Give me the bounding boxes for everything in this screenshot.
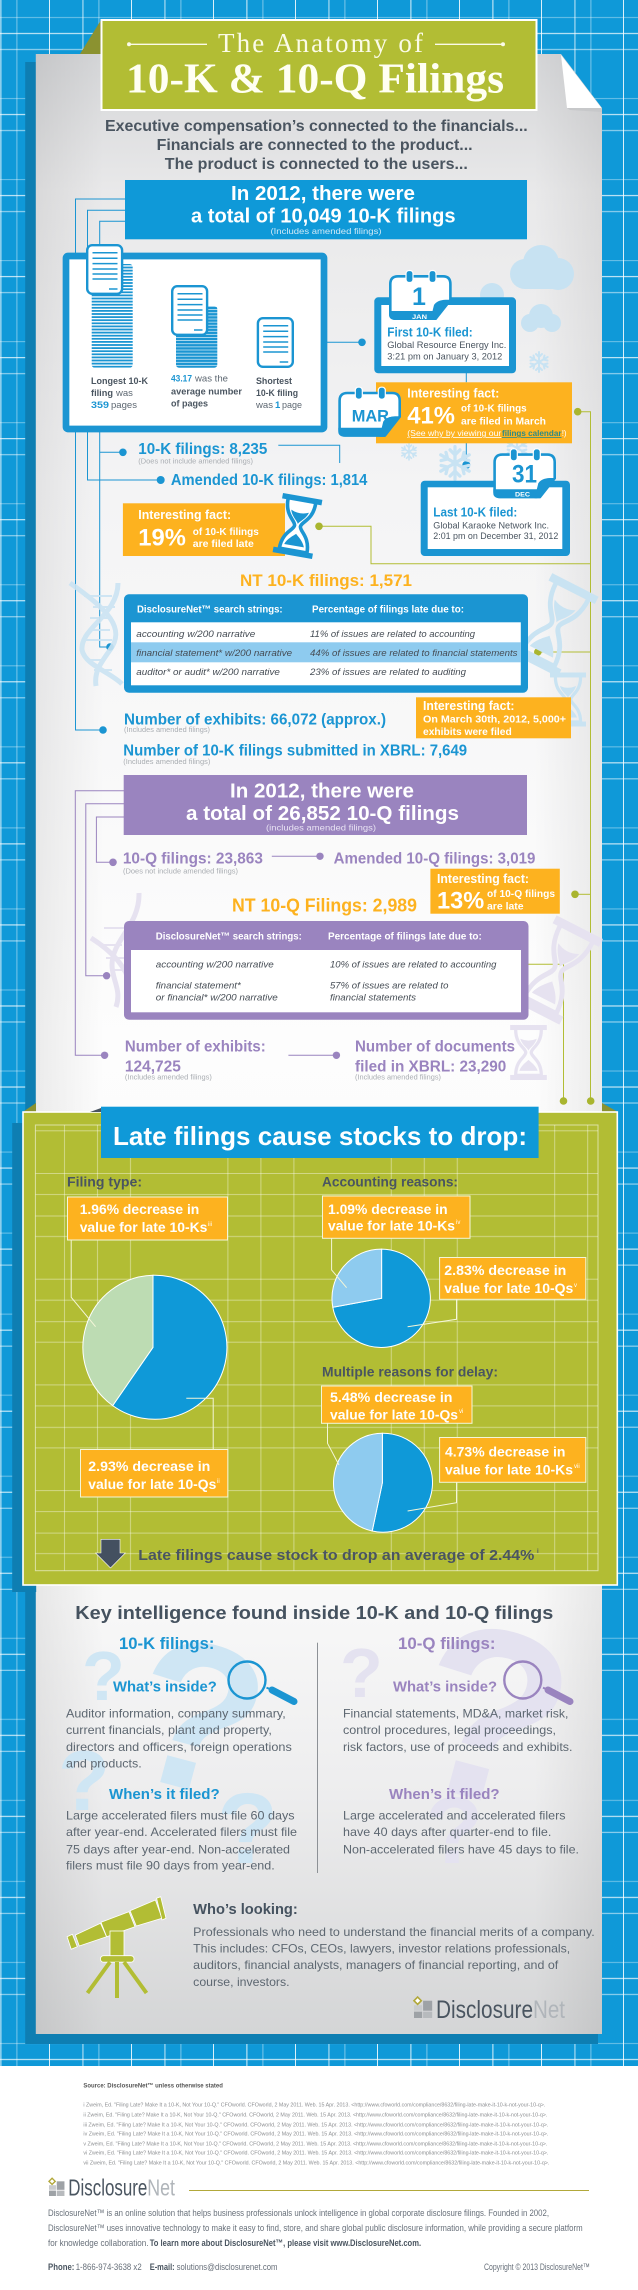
10-K connector dots: [99, 338, 470, 734]
shortest label: [255, 376, 302, 411]
amended 10-K stat: Amended 10-K filings: 1,814: [171, 472, 368, 489]
question mark decoration: ?: [82, 1637, 125, 1715]
callout: 2.93%: 2.93% decrease in: [88, 1458, 210, 1474]
NT 10-K table: 23% of issues are related to auditing: [309, 667, 467, 678]
divider: [317, 1643, 318, 1873]
March calendar icon: MAR: [352, 408, 389, 426]
icon: down arrow: [96, 1539, 125, 1568]
NT 10-Q table: or financial* w/200 narrative: [156, 993, 278, 1004]
interesting fact: 13%: are late: [487, 901, 524, 913]
contact line: solutions@disclosurenet.com: [177, 2262, 278, 2273]
average label: was the: [194, 374, 228, 385]
page count panel: [66, 245, 324, 429]
column: 10-Q filings: When’s it filed?: [389, 1787, 500, 1803]
amended 10-Q stat: Amended 10-Q filings: 3,019: [334, 850, 536, 867]
last 10-K card: Last 10-K filed:: [433, 506, 517, 520]
interesting fact: 19%: 19%: [138, 525, 186, 552]
interesting fact: 41%: (See why by viewing our: [407, 429, 502, 438]
column: 10-K filings: after year-end. Accelerated filers must file: [66, 1825, 297, 1839]
shortest filing icon: [258, 318, 293, 367]
last 10-K card: Global Karaoke Network Inc.: [433, 520, 549, 531]
who's looking: [193, 1902, 595, 1989]
DNA decoration purple: [91, 893, 139, 1007]
about text: for knowledge collaboration.: [48, 2238, 148, 2249]
column: 10-Q filings: Non-accelerated filers have 45 days to file.: [343, 1842, 579, 1856]
footer sources: i Zweim, Ed. "Filing Late? Make It a 10-K, Not Your 10-Q." CFOworld. CFOworld, 2 May 2011. Web. 15 Apr. 2013. <http://www.cfoworld.com/compliance/8632/filing-late-make-it-10-k-not-your-10-q>.: [83, 2103, 546, 2109]
interesting fact: 13%: 13%: [437, 887, 484, 914]
March calendar icon: [338, 387, 401, 437]
10-Q filings stat: [123, 850, 263, 876]
who's looking: This includes: CFOs, CEOs, lawyers, investor relations professionals,: [193, 1942, 570, 1956]
column: 10-K filings: [66, 1635, 297, 1872]
intro text: The product is connected to the users...: [165, 156, 468, 173]
icon: hourglass: [273, 493, 322, 559]
XBRL 10-Q stat: Number of documents: [355, 1039, 515, 1056]
10-Q filings stat: (Does not include amended filings): [123, 867, 238, 876]
XBRL 10-K stat: [123, 742, 467, 766]
callout: 1.96%: iii: [208, 1222, 212, 1228]
first 10-K card: 1: [412, 283, 426, 311]
XBRL 10-K stat: Number of 10-K filings submitted in XBRL: 7,649: [123, 742, 467, 759]
callout: 2.93%: ii: [217, 1479, 220, 1485]
10-Q connector dots: [101, 853, 340, 1059]
interesting fact: 19%: of 10-K filings: [193, 526, 259, 538]
footer sources: vi Zweim, Ed. "Filing Late? Make It a 10-K, Not Your 10-Q." CFOworld. CFOworld, 2 May 2011. Web. 15 Apr. 2013. <http://www.cfoworld.com/compliance/8632/filing-late-make-it-10-k-not-your-10-q>.: [83, 2151, 549, 2157]
question mark decoration: ?: [340, 1634, 383, 1712]
title banner: [80, 20, 536, 110]
10-Q connector lines: [75, 791, 334, 1055]
callout: 2.83%: [440, 1258, 586, 1299]
callout: 1.09%: [322, 1196, 470, 1238]
10-K exhibits stat: (Includes amended filings): [124, 725, 210, 734]
interesting fact: 41%: filings calendar: [502, 429, 562, 438]
contact line: Copyright © 2013 DisclosureNet™: [484, 2262, 590, 2273]
column: 10-K filings: Large accelerated filers must file 60 days: [66, 1808, 295, 1822]
accounting reasons label: Accounting reasons:: [322, 1175, 458, 1190]
about text: To learn more about DisclosureNet™, please visit www.DisclosureNet.com.: [150, 2238, 421, 2249]
interesting fact: exhibits: exhibits were filed: [423, 727, 512, 738]
interesting fact: exhibits: [416, 697, 571, 738]
callout: 1.09%: value for late 10-Ks: [328, 1218, 455, 1234]
average label: 43.17: [171, 374, 192, 385]
callout: 2.83%: value for late 10-Qs: [444, 1280, 574, 1296]
who's looking: Professionals who need to understand the financial merits of a company.: [193, 1925, 595, 1939]
XBRL 10-K stat: (Includes amended filings): [123, 757, 211, 766]
10-Q total banner: (includes amended filings): [266, 823, 376, 833]
shortest label: Shortest: [256, 376, 293, 387]
NT 10-Q table: [124, 921, 528, 1020]
longest label: [91, 376, 148, 411]
footer sources: [83, 2083, 550, 2167]
callout: 2.93%: value for late 10-Qs: [88, 1476, 217, 1492]
10-Q total banner: a total of 26,852 10-Q filings: [186, 802, 459, 825]
interesting fact: exhibits: On March 30th, 2012, 5,000+: [423, 715, 566, 726]
average drop statement: Late filings cause stock to drop an average of 2.44%: [138, 1547, 534, 1564]
key intelligence heading: Key intelligence found inside 10-K and 10-Q filings: [75, 1603, 553, 1623]
question mark decoration: ?: [58, 1734, 110, 1829]
longest label: 359: [91, 400, 109, 411]
NT 10-Q table: 10% of issues are related to accounting: [330, 960, 497, 971]
intro text: [105, 118, 528, 173]
title banner: The Anatomy of: [218, 28, 423, 58]
10-K total banner: (Includes amended filings): [270, 226, 382, 236]
interesting fact: 41%: 41%: [407, 402, 455, 429]
snowflakes: [402, 352, 548, 479]
shortest label: 10-K filing: [256, 388, 298, 399]
10-K total banner: In 2012, there were: [231, 182, 415, 205]
column: 10-K filings: Auditor information, company summary,: [66, 1706, 286, 1720]
first 10-K card: Global Resource Energy Inc.: [387, 340, 506, 351]
last 10-K card: [421, 449, 570, 556]
NT 10-K table: accounting w/200 narrative: [136, 629, 255, 640]
average label: average number: [171, 387, 242, 398]
10-K total banner: [125, 180, 527, 239]
icon: telescope: [67, 1897, 166, 1998]
leader lines: accounting reasons: [332, 1238, 456, 1327]
icon: magnifier purple: [504, 1662, 570, 1702]
longest filing stack: [87, 245, 133, 368]
multiple reasons label: Multiple reasons for delay:: [322, 1365, 498, 1380]
first 10-K card: [374, 270, 516, 373]
average label: of pages: [171, 399, 208, 410]
icon: magnifier blue: [228, 1662, 294, 1702]
paper sheet: [25, 54, 602, 2044]
footer sources: iv Zweim, Ed. "Filing Late? Make It a 10-K, Not Your 10-Q." CFOworld. CFOworld, 2 May 2011. Web. 15 Apr. 2013. <http://www.cfoworld.com/compliance/8632/filing-late-make-it-10-k-not-your-10-q>.: [83, 2132, 549, 2138]
panel heading: [90, 1107, 539, 1158]
shortest label: 1: [275, 400, 281, 411]
question mark decoration: ?: [425, 1778, 483, 1884]
callout: 1.09%: 1.09% decrease in: [328, 1201, 448, 1217]
interesting fact: 19%: Interesting fact:: [138, 508, 231, 522]
last 10-K card: 31: [512, 461, 537, 489]
callout: 4.73%: [440, 1438, 586, 1482]
10-K filings stat: [138, 441, 268, 466]
NT 10-Q table: DisclosureNet™ search strings:: [156, 932, 302, 943]
column: 10-Q filings: have 40 days after quarter-end to file.: [343, 1825, 551, 1839]
column: 10-Q filings: [343, 1635, 579, 1856]
column: 10-Q filings: Financial statements, MD&A, market risk,: [343, 1706, 568, 1720]
intro text: Executive compensation’s connected to the financials...: [105, 118, 528, 135]
question mark decoration: ?: [217, 1773, 278, 1885]
NT 10-Q table: accounting w/200 narrative: [156, 960, 274, 971]
pie chart: filing type: [83, 1275, 227, 1419]
interesting fact: 19%: [123, 503, 285, 556]
NT 10-K table: [124, 594, 528, 693]
10-Q filings stat: 10-Q filings: 23,863: [123, 850, 263, 867]
shortest label: page: [282, 400, 302, 411]
NT 10-Q table: Percentage of filings late due to:: [328, 932, 482, 943]
column: 10-Q filings: risk factors, use of proceeds and exhibits.: [343, 1740, 572, 1754]
panel heading: Late filings cause stocks to drop:: [113, 1121, 527, 1151]
contact line: E-mail:: [150, 2262, 175, 2273]
logo: DisclosureNet on paper: Disclosure: [436, 1996, 533, 2024]
callout: 1.96%: 1.96% decrease in: [80, 1201, 199, 1217]
interesting fact: exhibits: Interesting fact:: [423, 699, 514, 713]
contact line: [48, 2262, 590, 2273]
10-K exhibits stat: Number of exhibits: 66,072 (approx.): [124, 711, 386, 728]
10-Q exhibits stat: [125, 1039, 266, 1082]
last 10-K card: 2:01 pm on December 31, 2012: [433, 531, 558, 542]
callout: 5.48%: vi: [459, 1409, 463, 1415]
longest label: Longest 10-K: [91, 376, 148, 387]
interesting fact: 41%: Interesting fact:: [407, 387, 499, 401]
last 10-K card: DEC: [515, 492, 530, 499]
column: 10-Q filings: control procedures, legal proceedings,: [343, 1723, 556, 1737]
NT 10-K table: DisclosureNet™ search strings:: [137, 605, 283, 616]
longest label: was: [115, 388, 133, 399]
NT 10-K table: Percentage of filings late due to:: [312, 605, 464, 616]
column: 10-K filings: directors and officers, foreign operations: [66, 1740, 292, 1754]
XBRL 10-Q stat: [355, 1039, 515, 1082]
column: 10-K filings: 10-K filings:: [119, 1635, 214, 1653]
column: 10-K filings: What’s inside?: [113, 1680, 217, 1696]
callout: 5.48%: [322, 1386, 472, 1423]
column: 10-K filings: and products.: [66, 1756, 142, 1770]
column: 10-K filings: current financials, plant and property,: [66, 1723, 272, 1737]
interesting fact: 13%: of 10-Q filings: [487, 888, 555, 900]
10-Q exhibits stat: Number of exhibits:: [125, 1039, 266, 1056]
callout: 4.73%: 4.73% decrease in: [445, 1444, 565, 1460]
filing type label: Filing type:: [67, 1175, 142, 1190]
panel grid: [35, 1125, 598, 1571]
NT 10-K table: 44% of issues are related to financial statements: [310, 648, 518, 659]
callout: 1.96%: [68, 1197, 228, 1240]
column: 10-K filings: When’s it filed?: [109, 1787, 220, 1803]
callout: 2.83%: v: [574, 1283, 577, 1289]
NT 10-K table: auditor* or audit* w/200 narrative: [136, 667, 280, 678]
callout: 2.83%: 2.83% decrease in: [444, 1262, 566, 1278]
NT 10-Q heading: NT 10-Q Filings: 2,989: [232, 896, 417, 916]
NT 10-K table: financial statement* w/200 narrative: [136, 648, 292, 659]
leader lines: multiple reasons: [328, 1423, 456, 1511]
NT 10-Q table: 57% of issues are related to: [330, 981, 448, 992]
question mark decoration: ?: [383, 1563, 599, 1867]
logo: DisclosureNet on paper: Net: [533, 1996, 565, 2024]
footer sources: ii Zweim, Ed. "Filing Late? Make It a 10-K, Not Your 10-Q." CFOworld. CFOworld, 2 May 2011. Web. 15 Apr. 2013. <http://www.cfoworld.com/compliance/8632/filing-late-make-it-10-k-not-your-10-q>.: [83, 2113, 548, 2119]
leader lines: filing type: [71, 1240, 213, 1449]
olive connector dots: [315, 408, 594, 1105]
logo: DisclosureNet footer: Net: [147, 2175, 175, 2201]
olive connector lines: [320, 412, 590, 1100]
interesting fact: 41%: [376, 382, 572, 443]
callout: 4.73%: value for late 10-Ks: [445, 1462, 573, 1478]
interesting fact: 13%: [430, 869, 560, 914]
average drop statement: i: [537, 1549, 539, 1555]
footer sources: iii Zweim, Ed. "Filing Late? Make It a 10-K, Not Your 10-Q." CFOworld. CFOworld, 2 May 2011. Web. 15 Apr. 2013. <http://www.cfoworld.com/compliance/8632/filing-late-make-it-10-k-not-your-10-q>.: [83, 2123, 549, 2129]
pie chart: multiple reasons: [334, 1433, 433, 1532]
callout: 1.09%: iv: [456, 1220, 460, 1226]
who's looking: Who’s looking:: [193, 1902, 298, 1918]
late filings panel: [12, 1103, 618, 1592]
NT 10-K table: 11% of issues are related to accounting: [310, 629, 476, 640]
average label: [171, 374, 242, 410]
footer sources: v Zweim, Ed. "Filing Late? Make It a 10-K, Not Your 10-Q." CFOworld. CFOworld, 2 May 2011. Web. 15 Apr. 2013. <http://www.cfoworld.com/compliance/8632/filing-late-make-it-10-k-not-your-10-q>.: [83, 2141, 548, 2147]
shortest label: was: [255, 400, 273, 411]
interesting fact: 41%: are filed in March: [461, 416, 546, 428]
question mark decoration: [58, 1563, 599, 1885]
hourglass decoration blue: [511, 573, 599, 726]
who's looking: course, investors.: [193, 1975, 290, 1989]
title banner: 10-K & 10-Q Filings: [126, 57, 504, 103]
10-Q exhibits stat: 124,725: [125, 1059, 181, 1076]
callout: 4.73%: vii: [574, 1464, 580, 1470]
10-Q total banner: [124, 775, 527, 835]
callout: 1.96%: value for late 10-Ks: [80, 1219, 208, 1235]
column: 10-K filings: filers must file 90 days from year-end.: [66, 1858, 275, 1872]
footer rule: [189, 2190, 589, 2191]
10-K filings stat: (Does not include amended filings): [138, 457, 253, 466]
contact line: Phone:: [48, 2262, 74, 2273]
column: 10-Q filings: 10-Q filings:: [398, 1635, 496, 1653]
longest label: pages: [111, 400, 137, 411]
intro text: Financials are connected to the product...: [157, 137, 473, 154]
hourglass decoration purple: [510, 915, 603, 1080]
DNA decoration blue: [70, 583, 122, 686]
pie chart: accounting reasons: [332, 1249, 430, 1347]
clouds: [480, 245, 574, 332]
contact line: 1-866-974-3638 x2: [76, 2262, 142, 2273]
10-K connector lines: [76, 199, 466, 730]
longest label: filing: [91, 388, 113, 399]
callout: 2.93%: [80, 1450, 228, 1497]
interesting fact: 13%: Interesting fact:: [437, 872, 529, 886]
NT 10-Q table: financial statement*: [156, 981, 241, 992]
10-Q exhibits stat: (Includes amended filings): [125, 1073, 212, 1082]
who's looking: auditors, financial analysts, managers of financial reporting, and of: [193, 1958, 559, 1972]
XBRL 10-Q stat: (Includes amended filings): [355, 1073, 441, 1082]
interesting fact: 41%: !): [562, 429, 567, 438]
logo: DisclosureNet footer: Disclosure: [68, 2175, 147, 2201]
10-Q total banner: In 2012, there were: [230, 779, 414, 802]
first 10-K card: 3:21 pm on January 3, 2012: [387, 351, 502, 362]
interesting fact: 19%: are filed late: [193, 538, 254, 550]
footer sources: vii Zweim, Ed. "Filing Late? Make It a 10-K, Not Your 10-Q." CFOworld. CFOworld, 2 May 2011. Web. 15 Apr. 2013. <http://www.cfoworld.com/compliance/8632/filing-late-make-it-10-k-not-your-10-q>.: [83, 2161, 550, 2167]
callout: 5.48%: 5.48% decrease in: [330, 1389, 452, 1405]
10-K total banner: a total of 10,049 10-K filings: [191, 205, 456, 228]
10-K filings stat: 10-K filings: 8,235: [138, 441, 268, 458]
NT 10-K heading: NT 10-K filings: 1,571: [240, 571, 412, 590]
footer sources: Source: DisclosureNet™ unless otherwise stated: [83, 2083, 223, 2090]
first 10-K card: JAN: [412, 314, 427, 321]
interesting fact: 41%: of 10-K filings: [461, 403, 527, 415]
NT 10-Q table: financial statements: [330, 993, 416, 1004]
callout: 5.48%: value for late 10-Qs: [330, 1406, 458, 1422]
column: 10-Q filings: Large accelerated and accelerated filers: [343, 1808, 566, 1822]
about text: [48, 2208, 583, 2249]
question mark decoration: ?: [105, 1587, 290, 1847]
column: 10-K filings: 75 days after year-end. Non-accelerated: [66, 1842, 290, 1856]
XBRL 10-Q stat: filed in XBRL: 23,290: [355, 1059, 506, 1076]
column: 10-Q filings: What’s inside?: [393, 1680, 497, 1696]
average filing stack: [172, 286, 217, 368]
first 10-K card: First 10-K filed:: [387, 326, 473, 340]
